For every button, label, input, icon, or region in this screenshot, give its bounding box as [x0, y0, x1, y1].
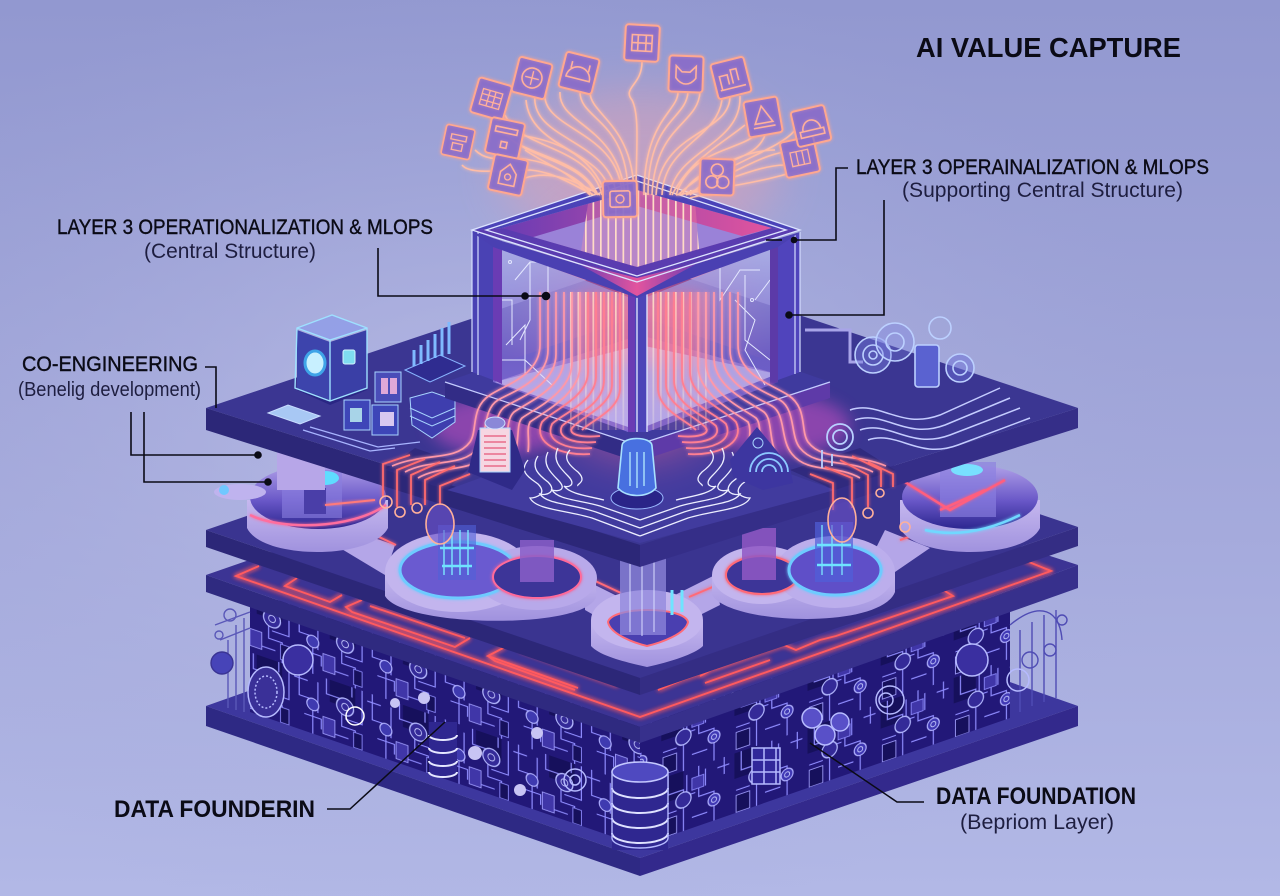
cube top frame: [472, 175, 800, 298]
label: data foundation: (Bepriom Layer): [960, 811, 1114, 834]
icon: bar chart on slab: [405, 322, 465, 382]
label: co-engineering: (Benelig development): [18, 379, 201, 401]
wire trunk above cube: [580, 190, 700, 272]
wires: inner loops right: [658, 292, 738, 454]
bright floor overlay: [495, 345, 777, 430]
pot: left-center twin module: [385, 525, 597, 621]
branches: top icon: [629, 62, 642, 195]
wires: outer bundle left: [392, 292, 580, 478]
title: AI VALUE CAPTURE: [916, 32, 1181, 63]
soft pink wash under wires: [430, 395, 850, 455]
wire nodes: [380, 489, 910, 544]
icon: glass cube on slab: [295, 315, 367, 405]
icon: node 6: [470, 77, 512, 121]
circuit components: [248, 644, 1029, 796]
right post: [770, 232, 800, 385]
pink wire wash in glass: [580, 294, 700, 364]
glass panel left: [493, 245, 628, 432]
raised center plate: [385, 420, 895, 543]
loose components left edge: [211, 609, 250, 712]
label: layer 3 left: LAYER 3 OPERATIONALIZATION & MLOPS: [57, 215, 433, 239]
icon: node 12: [488, 154, 528, 196]
label: data founderin: DATA FOUNDERIN: [114, 796, 315, 823]
wires: center plate squiggles right: [640, 448, 756, 536]
icon: node 4: [668, 55, 704, 93]
connector traces on slab: [360, 520, 960, 597]
panel: red traced slab: [206, 424, 1078, 743]
label: data foundation: DATA FOUNDATION: [936, 783, 1136, 810]
icon: node 9: [790, 105, 832, 147]
panel: data foundation slab: [206, 552, 1078, 876]
pot: far right module: [900, 462, 1040, 552]
lilac channels between pots: [340, 530, 930, 630]
leader: layer 3 right upper: [766, 168, 848, 242]
device: arch unit: [730, 427, 793, 490]
left post: [472, 230, 502, 384]
device: battery unit: [468, 417, 525, 490]
cube base: [445, 316, 830, 462]
panel: co-engineering slab: [206, 380, 1078, 695]
leader: data founderin: [327, 722, 445, 809]
pot: right-center twin module: [712, 522, 895, 619]
branches: far right icons: [672, 125, 800, 198]
leader: layer 3 left: [378, 248, 550, 300]
wire columns in glass: [570, 292, 710, 430]
icon: ring cluster on slab: [805, 317, 974, 387]
circuit field: right half: [640, 600, 1010, 846]
label: layer 3 left: [57, 215, 433, 263]
panel: main operational slab: [206, 262, 1078, 567]
icon: node 1: [624, 24, 660, 62]
co-engineering device: [214, 448, 325, 500]
wires: outer bundle right: [698, 292, 886, 478]
icon: server boxes on slab: [268, 372, 455, 438]
pot: far left module: [247, 465, 388, 552]
circuit field: left half: [250, 600, 640, 846]
wires: red drops over slab edge: [383, 455, 893, 510]
loose components right edge: [1010, 610, 1067, 712]
leader: layer 3 right lower: [786, 200, 884, 318]
front post: [628, 282, 647, 432]
leader: co-engineering first: [131, 412, 261, 458]
leader: co-engineering top: [205, 367, 216, 408]
database icon: front stack: [612, 762, 668, 850]
branches: upper-right icons: [644, 92, 740, 195]
label: layer 3 right: [856, 155, 1209, 202]
label: layer 3 right: LAYER 3 OPERAINALIZATION & MLOPS: [856, 155, 1209, 179]
label: data foundation: [936, 783, 1136, 834]
neon trace: outer border: [236, 560, 1051, 717]
wire tree: [462, 62, 800, 198]
glass panel right: [647, 245, 778, 432]
glow behind cube: [500, 90, 780, 460]
icon: node 10: [441, 124, 475, 160]
label: layer 3 left: (Central Structure): [144, 240, 316, 263]
pot: front module: [591, 555, 703, 667]
leader: data foundation: [810, 743, 924, 802]
icon: node 13: [699, 158, 735, 196]
cube floor: [495, 335, 777, 430]
icon: node 2: [511, 56, 553, 100]
icon: node 5: [710, 56, 752, 100]
panel: central cube: [445, 175, 830, 462]
blue board traces left: [303, 427, 420, 451]
icon: node 8 (rear): [780, 136, 820, 178]
leader: co-engineering second: [144, 412, 271, 485]
icons: value nodes: [441, 24, 832, 217]
cube back interior: [502, 190, 772, 267]
label: layer 3 right: (Supporting Central Structure): [902, 179, 1183, 202]
database icon: rear stack: [429, 722, 457, 778]
device: center lamp: [611, 438, 663, 509]
wires: center plate squiggles left: [524, 448, 640, 536]
blue board traces right: [850, 388, 1030, 449]
icon: node 3: [558, 51, 600, 95]
device: right node: [822, 424, 853, 468]
branches: upper-left icons: [526, 92, 634, 195]
branches: far left icons: [462, 115, 606, 195]
icon: node 14: [603, 181, 637, 217]
label: co-engineering: [18, 352, 201, 401]
icon: node 7: [743, 96, 783, 138]
wires: inner loops left: [540, 292, 620, 454]
label: co-engineering: CO-ENGINEERING: [22, 352, 198, 376]
icon: node 11: [485, 117, 525, 159]
